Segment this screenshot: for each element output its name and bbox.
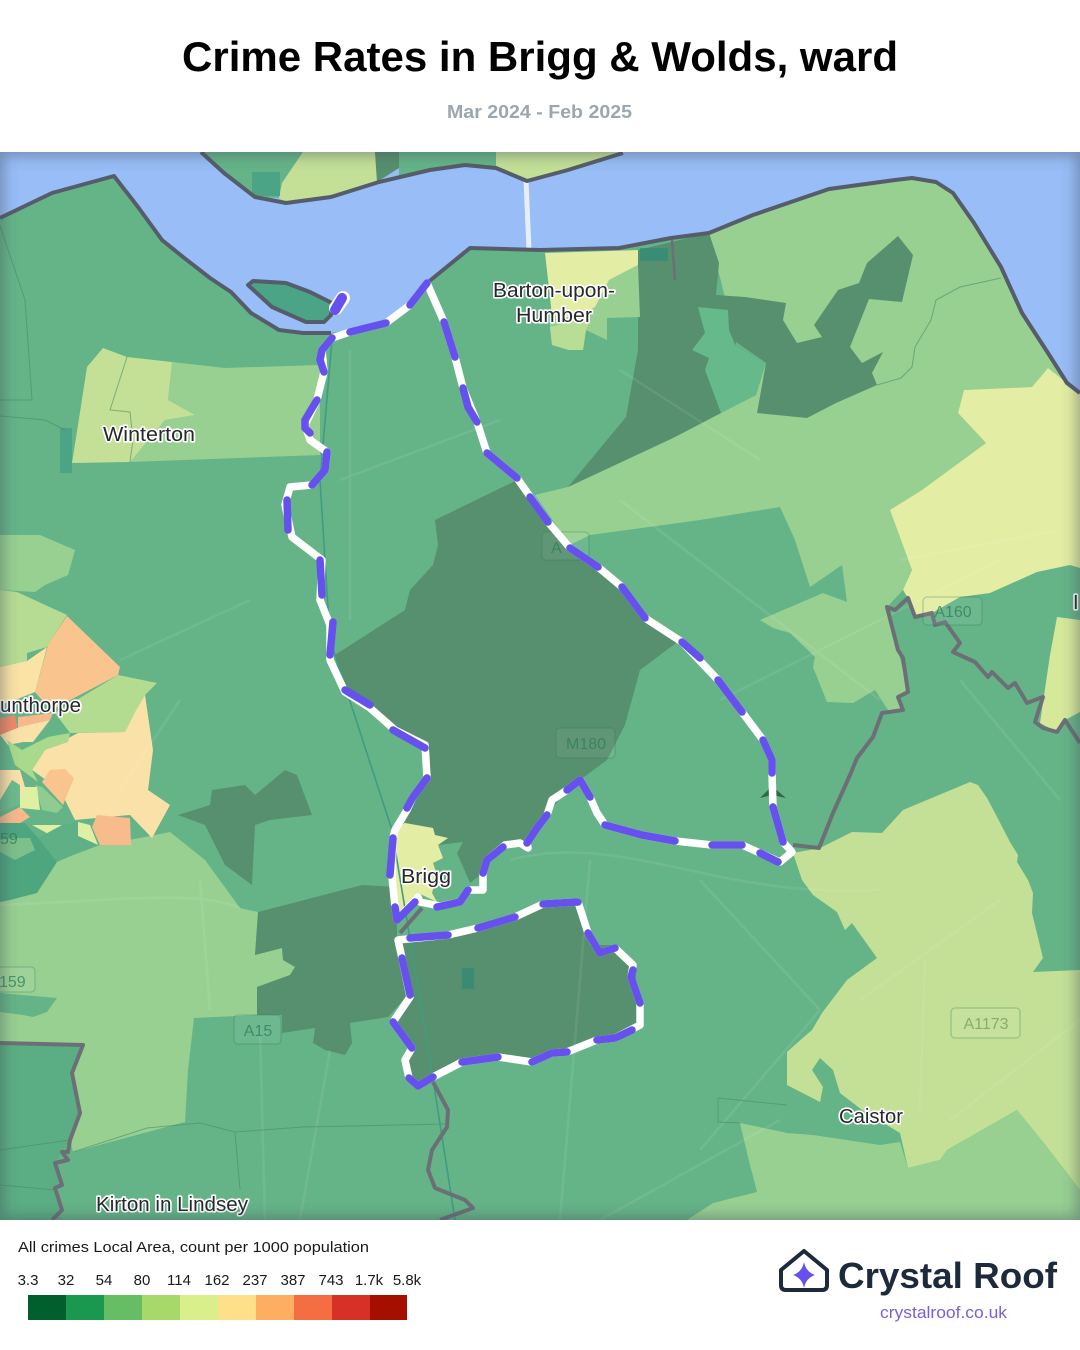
place label: Barton-upon-Humber xyxy=(493,280,615,327)
road sign: A1173 xyxy=(951,1008,1020,1038)
south dark ward xyxy=(392,902,640,1085)
light green wards east xyxy=(535,178,1067,710)
small dark ward xyxy=(178,770,312,885)
legend xyxy=(18,1239,422,1320)
logo: Crystal Roof xyxy=(781,1251,1058,1322)
logo url: crystalroof.co.uk xyxy=(880,1304,1008,1322)
road sign: A160 xyxy=(923,597,982,625)
local authority boundaries xyxy=(0,152,1080,1220)
road sign: A15 xyxy=(234,1015,281,1044)
legend scale values: 114 xyxy=(167,1272,191,1289)
thin ward lines xyxy=(0,226,1001,1190)
bridge xyxy=(526,180,529,250)
legend scale values: 3.3 xyxy=(18,1272,38,1289)
place label: clipped at edge: I xyxy=(1073,592,1079,614)
faint roads xyxy=(120,350,1060,1220)
teal mid ward inside dark xyxy=(692,307,766,413)
legend colour ramp xyxy=(28,1295,407,1320)
legend scale values: 237 xyxy=(242,1272,268,1289)
central dark ward xyxy=(335,480,680,883)
ward outline: main section xyxy=(285,283,792,920)
railway line xyxy=(320,340,455,1220)
Brigg town ward xyxy=(396,823,448,912)
ward outline: south section xyxy=(393,902,640,1086)
Scunthorpe mosaic wards xyxy=(0,535,170,902)
west dark ward xyxy=(255,885,408,1055)
place label: Caistor: Caistor xyxy=(839,1106,903,1128)
small mid patch xyxy=(0,993,57,1017)
east lime ward xyxy=(787,782,1080,1190)
Barton-upon-Humber wards xyxy=(545,248,668,350)
legend scale values xyxy=(18,1272,422,1289)
place label: Winterton: Winterton xyxy=(103,424,195,446)
map edge shadow xyxy=(0,146,1080,1226)
south-east light ward xyxy=(687,1110,1080,1220)
place label: Kirton in Lindsey: Kirton in Lindsey xyxy=(96,1194,248,1216)
legend scale values: 1.7k xyxy=(355,1272,384,1289)
legend scale values: 387 xyxy=(280,1272,306,1289)
choropleth map xyxy=(0,146,1080,1226)
south-west grey-edged green ward xyxy=(4,1046,80,1216)
pale lime strip east xyxy=(1040,617,1080,732)
north bank land xyxy=(201,152,625,203)
road sign: M180 xyxy=(556,728,615,758)
place label: Barton-upon-Humber: Humber xyxy=(516,305,592,327)
dark ward north xyxy=(568,233,913,487)
legend scale values: 5.8k xyxy=(393,1272,422,1289)
map pointer icon xyxy=(760,789,786,798)
ward outline: island tip xyxy=(335,298,343,310)
legend title: All crimes Local Area, count per 1000 population xyxy=(18,1239,369,1256)
south bank base land xyxy=(0,176,1080,1220)
road sign: A15: A15 xyxy=(244,1023,272,1040)
road sign: A160: A160 xyxy=(934,604,972,621)
road sign: M180: M180 xyxy=(566,736,606,753)
island xyxy=(248,281,332,322)
legend scale values: 54 xyxy=(96,1272,112,1289)
icon: house with star xyxy=(781,1251,827,1290)
logo wordmark: Crystal Roof xyxy=(838,1255,1058,1296)
road sign: A159 xyxy=(0,967,35,992)
legend scale values: 743 xyxy=(318,1272,344,1289)
place label: Scunthorpe: unthorpe xyxy=(0,695,81,717)
title: Crime Rates in Brigg & Wolds, ward xyxy=(182,33,898,80)
road sign: A1173: A1173 xyxy=(963,1016,1009,1033)
place label: Brigg: Brigg xyxy=(401,866,451,888)
Winterton wards xyxy=(60,348,320,473)
subtitle: date range: Mar 2024 - Feb 2025 xyxy=(447,101,632,122)
place label: Barton-upon-Humber: Barton-upon- xyxy=(493,280,615,302)
road sign: A road: A xyxy=(551,540,562,557)
pale yellow ward xyxy=(890,368,1080,617)
legend scale values: 32 xyxy=(58,1272,74,1289)
road sign: A road xyxy=(542,532,589,560)
legend scale values: 80 xyxy=(134,1272,150,1289)
road sign: 59: 59 xyxy=(0,831,18,848)
water: Humber estuary xyxy=(0,152,1080,390)
legend scale values: 162 xyxy=(204,1272,230,1289)
west light green ward xyxy=(0,832,295,1152)
